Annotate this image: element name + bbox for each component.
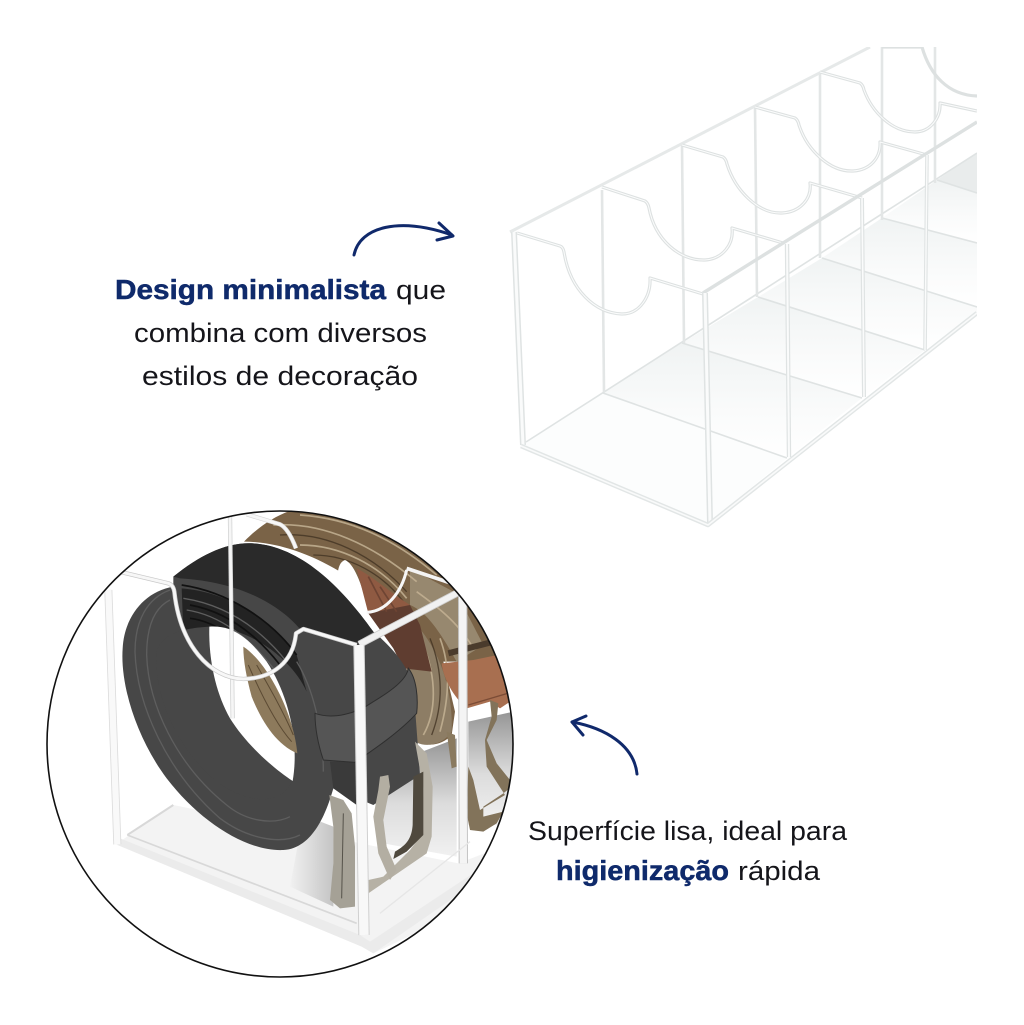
text: surface callout: Superfície lisa, ideal para: [528, 816, 848, 846]
belt keeper loop: [315, 668, 417, 762]
hole in black belt: [209, 626, 297, 781]
arrow pointing to organizer: [354, 223, 453, 255]
product image: empty acrylic belt organizer: [510, 47, 977, 525]
silver buckle: [329, 742, 433, 908]
organizer floor cells: [609, 154, 977, 390]
text: design callout: que: [396, 275, 446, 305]
back buckle: [447, 700, 512, 832]
text: surface callout: higienização: [556, 855, 729, 886]
white base of organizer: [124, 805, 484, 952]
base front edge: [521, 313, 977, 525]
divider scoops: [517, 47, 977, 314]
white gap in back belt: [338, 560, 364, 596]
braided belt: [244, 512, 495, 745]
text: design callout: combina com diversos: [134, 318, 427, 348]
black belt body: [122, 543, 420, 850]
tan leather belt: [357, 568, 515, 708]
arrow pointing to circle: [572, 716, 637, 774]
text: design callout: Design minimalista: [115, 274, 386, 305]
detail circle: belts in organizer: [47, 505, 523, 977]
text: surface callout: rápida: [738, 856, 821, 886]
floor lines: [526, 153, 977, 458]
text: design callout: estilos de decoração: [142, 361, 418, 391]
text: design callout: [115, 274, 446, 391]
white back floor line: [260, 744, 281, 754]
fold under keeper: [330, 762, 357, 805]
acrylic walls: [108, 514, 470, 935]
inner divider verticals: [602, 47, 935, 392]
front top edge: [703, 122, 977, 293]
circle outline: [47, 511, 513, 977]
text: surface callout: [528, 816, 848, 886]
front panel verticals: [514, 155, 927, 523]
back top edge: [510, 47, 870, 232]
shadows on floor behind buckles: [290, 712, 513, 907]
